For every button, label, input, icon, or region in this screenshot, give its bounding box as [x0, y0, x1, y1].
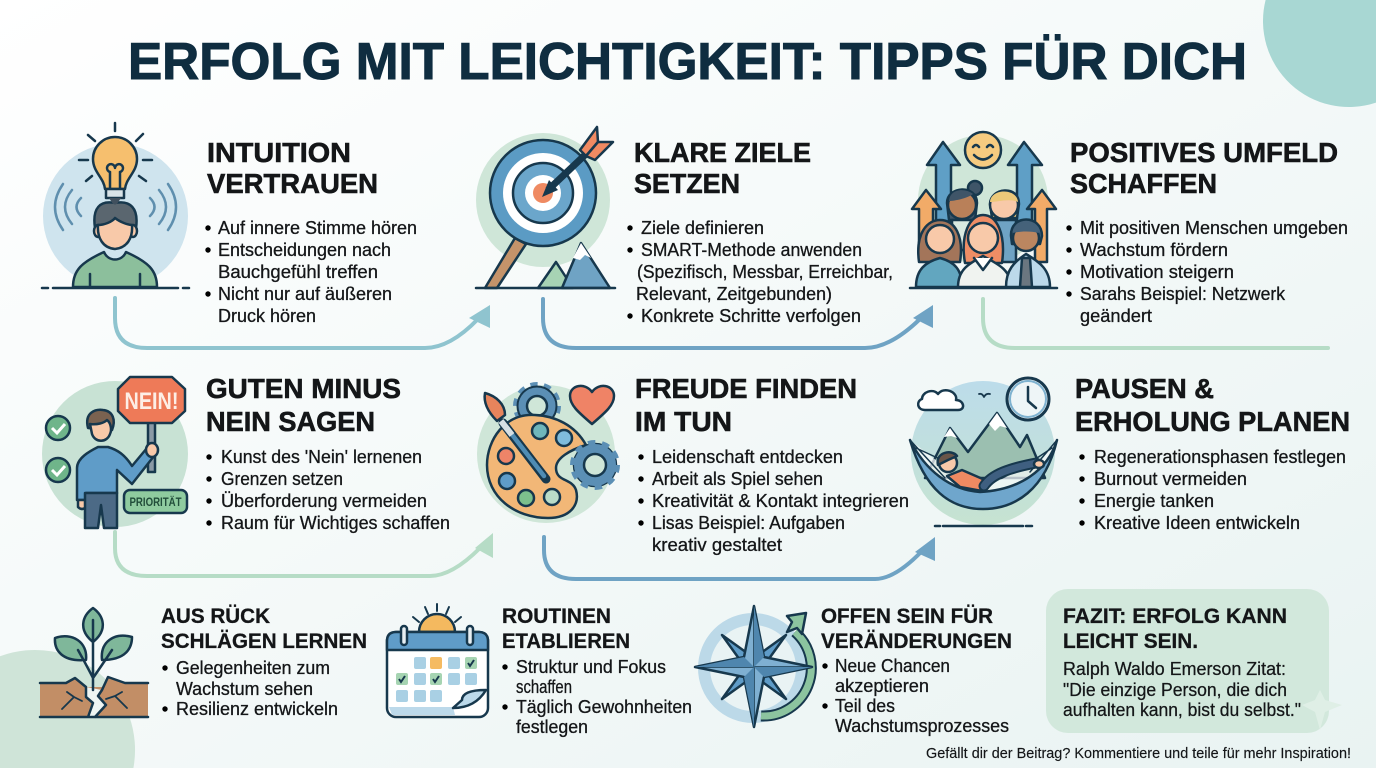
heading: [1063, 604, 1287, 653]
bullet list: Kreative Ideen entwickeln: [1094, 513, 1300, 533]
bullet list: Auf innere Stimme hören: [218, 218, 417, 238]
icon: compass star with green arrow: [695, 606, 812, 727]
bullet list: [205, 218, 417, 326]
heading: FREUDE FINDEN: [635, 373, 857, 404]
heading: LEICHT SEIN.: [1063, 629, 1198, 653]
heading: POSITIVES UMFELD: [1070, 137, 1338, 168]
footer call to action: Gefällt dir der Beitrag? Kommentiere und teile für mehr Inspiration!: [926, 746, 1351, 762]
bullet list: Nicht nur auf äußeren: [218, 284, 392, 304]
heading: SCHAFFEN: [1070, 168, 1217, 199]
bullet list: [627, 218, 893, 326]
bullet list: Sarahs Beispiel: Netzwerk: [1080, 284, 1286, 304]
heading: [634, 137, 811, 199]
heading: ROUTINEN: [502, 604, 611, 628]
bullet list: Energie tanken: [1094, 491, 1214, 511]
bullet list: [822, 656, 1009, 736]
heading: FAZIT: ERFOLG KANN: [1063, 604, 1287, 628]
bullet list: Kunst des 'Nein' lernenen: [221, 447, 422, 467]
bullet list: Wachstumsprozesses: [835, 716, 1009, 736]
bullet list: Ziele definieren: [641, 218, 764, 238]
panel: Klare Ziele setzen: [476, 127, 893, 326]
panel: Routinen etablieren: [387, 604, 692, 737]
bullet list: Burnout vermeiden: [1094, 469, 1247, 489]
heading: VERTRAUEN: [207, 168, 378, 199]
heading: [206, 373, 401, 437]
bullet list: [162, 658, 338, 719]
bullet list: geändert: [1080, 306, 1152, 326]
bullet list: [638, 447, 909, 555]
heading: AUS RÜCK: [161, 603, 270, 628]
icon: person with NEIN sign: [42, 377, 188, 528]
bullet list: Mit positiven Menschen umgeben: [1080, 218, 1348, 238]
icon: sprout in cracked soil: [40, 608, 148, 717]
heading: IM TUN: [635, 406, 732, 437]
arrow: goals to environment: [543, 299, 933, 348]
panel: Aus Rückschlägen lernen: [40, 603, 367, 719]
bullet list: Lisas Beispiel: Aufgaben: [652, 513, 845, 533]
panel: Fazit: [1046, 589, 1342, 733]
bullet list: Regenerationsphasen festlegen: [1094, 447, 1346, 467]
quote: "Die einzige Person, die dich: [1063, 680, 1287, 700]
bullet list: Wachstum sehen: [176, 679, 313, 699]
bullet list: Überforderung vermeiden: [221, 491, 427, 511]
arrow: nein to joy: [115, 532, 493, 576]
quote: Ralph Waldo Emerson Zitat:: [1063, 659, 1286, 679]
bullet list: Grenzen setzen: [221, 469, 343, 489]
bullet list: Neue Chancen: [835, 656, 950, 676]
panel: Offen sein für Veränderungen: [695, 603, 1012, 736]
arrow: intuition to goals: [115, 298, 490, 348]
heading: NEIN SAGEN: [206, 406, 375, 437]
bullet list: [1066, 218, 1348, 326]
heading: OFFEN SEIN FÜR: [821, 603, 993, 628]
icon: person with NEIN sign: NEIN!: [124, 388, 178, 415]
bullet list: Wachstum fördern: [1080, 240, 1228, 260]
bullet list: Resilienz entwickeln: [176, 699, 338, 719]
heading: VERÄNDERUNGEN: [821, 629, 1012, 653]
quote: [1063, 659, 1301, 720]
bullet list: Raum für Wichtiges schaffen: [221, 513, 450, 533]
bullet list: akzeptieren: [835, 676, 929, 696]
panel: Pausen und Erholung planen: [910, 373, 1350, 533]
icon: group with arrows and smiley: [910, 132, 1057, 288]
bullet list: Teil des: [835, 696, 895, 716]
bullet list: [502, 657, 692, 737]
bullet list: (Spezifisch, Messbar, Erreichbar,: [637, 262, 893, 282]
bullet list: [1079, 447, 1346, 533]
title: ERFOLG MIT LEICHTIGKEIT: TIPPS FÜR DICH: [128, 33, 1247, 91]
bullet list: Täglich Gewohnheiten: [516, 697, 692, 717]
bullet list: Relevant, Zeitgebunden): [636, 284, 832, 304]
icon: hammock, mountains, clock: [910, 378, 1057, 526]
bullet list: Konkrete Schritte verfolgen: [641, 306, 861, 326]
bullet list: Druck hören: [218, 306, 316, 326]
panel: Guten Minus Nein sagen: [42, 373, 450, 533]
heading: [1070, 137, 1338, 199]
heading: PAUSEN &: [1075, 373, 1214, 404]
heading: [821, 603, 1012, 653]
bullet list: Motivation steigern: [1080, 262, 1234, 282]
quote: aufhalten kann, bist du selbst.": [1063, 700, 1301, 720]
heading: KLARE ZIELE: [634, 137, 811, 168]
bullet list: Leidenschaft entdecken: [652, 447, 843, 467]
heading: [1075, 373, 1350, 437]
bullet list: Entscheidungen nach: [218, 240, 391, 260]
bullet list: schaffen: [516, 677, 572, 697]
bullet list: [206, 447, 450, 533]
heading: ETABLIEREN: [502, 629, 630, 653]
bullet list: kreativ gestaltet: [652, 535, 782, 555]
arrow: environment line: [983, 299, 1328, 348]
bullet list: Kreativität & Kontakt integrieren: [652, 491, 909, 511]
heading: [207, 137, 378, 199]
bullet list: Gelegenheiten zum: [176, 658, 330, 678]
badge: PRIORITÄT: [124, 490, 187, 513]
arrow: joy to breaks: [544, 537, 935, 579]
heading: SETZEN: [634, 168, 740, 199]
heading: SCHLÄGEN LERNEN: [161, 629, 367, 653]
bullet list: Struktur und Fokus: [516, 657, 666, 677]
heading: [161, 603, 367, 653]
heading: [635, 373, 857, 437]
icon: calendar with sun: [387, 604, 488, 717]
heading: INTUITION: [207, 137, 351, 168]
panel: Freude finden im Tun: [477, 373, 909, 555]
icon: palette, gears and heart: [477, 385, 617, 523]
icon: person with light bulb: [42, 123, 189, 288]
bullet list: SMART-Methode anwenden: [641, 240, 862, 260]
panel: Intuition vertrauen: [42, 123, 417, 326]
bullet list: Bauchgefühl treffen: [218, 262, 378, 282]
heading: GUTEN MINUS: [206, 373, 401, 404]
bullet list: Arbeit als Spiel sehen: [652, 469, 823, 489]
panel: Positives Umfeld schaffen: [910, 132, 1348, 326]
heading: ERHOLUNG PLANEN: [1075, 406, 1350, 437]
heading: [502, 604, 630, 653]
bullet list: festlegen: [516, 717, 588, 737]
badge: PRIORITÄT: PRIORITÄT: [130, 494, 182, 509]
icon: target with arrow and mountains: [476, 127, 615, 288]
